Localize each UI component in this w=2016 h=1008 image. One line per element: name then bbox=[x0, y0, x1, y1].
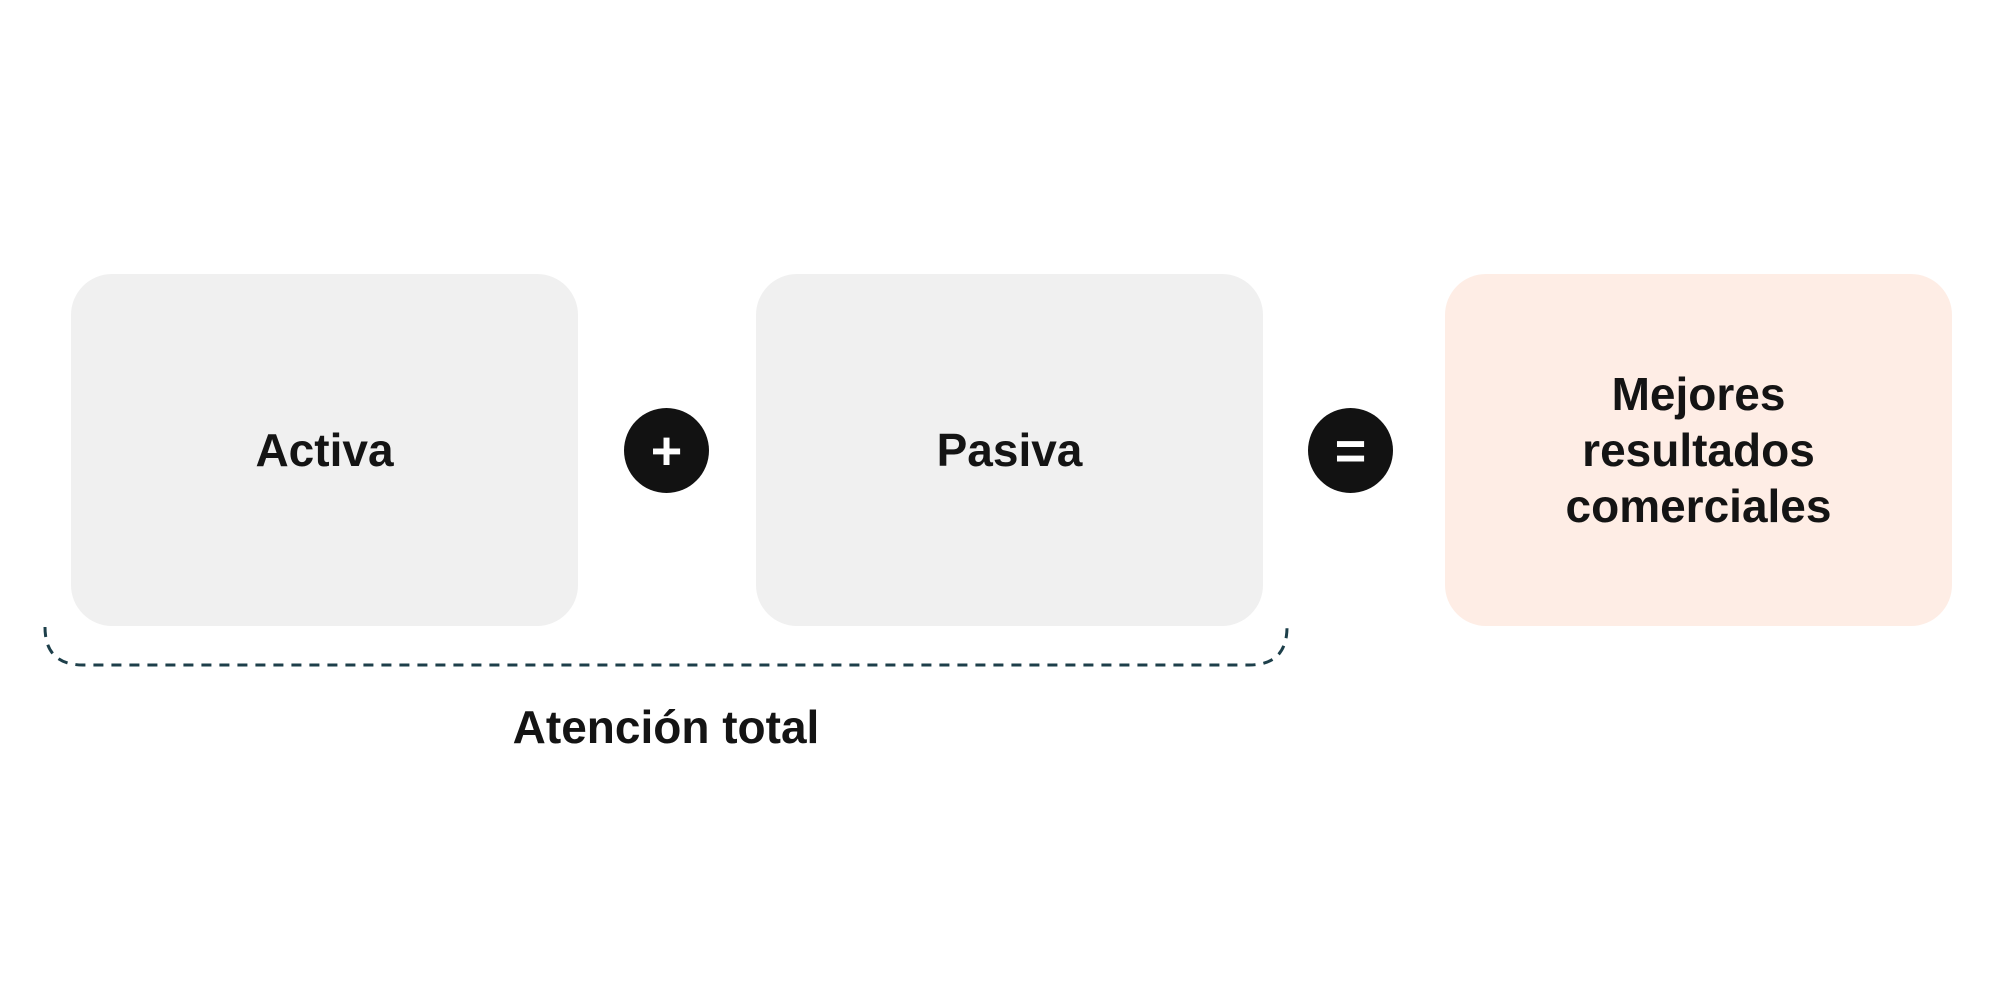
panel: Pasiva bbox=[756, 274, 1263, 626]
panel: Mejores resultados comerciales bbox=[1445, 274, 1952, 626]
panel: Mejores resultados comerciales: comerciales bbox=[1566, 480, 1831, 532]
panel: Activa bbox=[71, 274, 578, 626]
panel: Pasiva: Pasiva bbox=[937, 424, 1082, 476]
panel: Activa: Activa bbox=[255, 424, 394, 476]
panel: Mejores resultados comerciales: Mejores bbox=[1612, 368, 1785, 420]
icon: equals bbox=[1308, 408, 1393, 493]
panel: Mejores resultados comerciales: resultados bbox=[1582, 424, 1815, 476]
icon: plus bbox=[624, 408, 709, 493]
icon: equals: = bbox=[1335, 420, 1366, 480]
label: Atención total: Atención total bbox=[513, 701, 819, 753]
icon: plus: + bbox=[651, 420, 682, 480]
